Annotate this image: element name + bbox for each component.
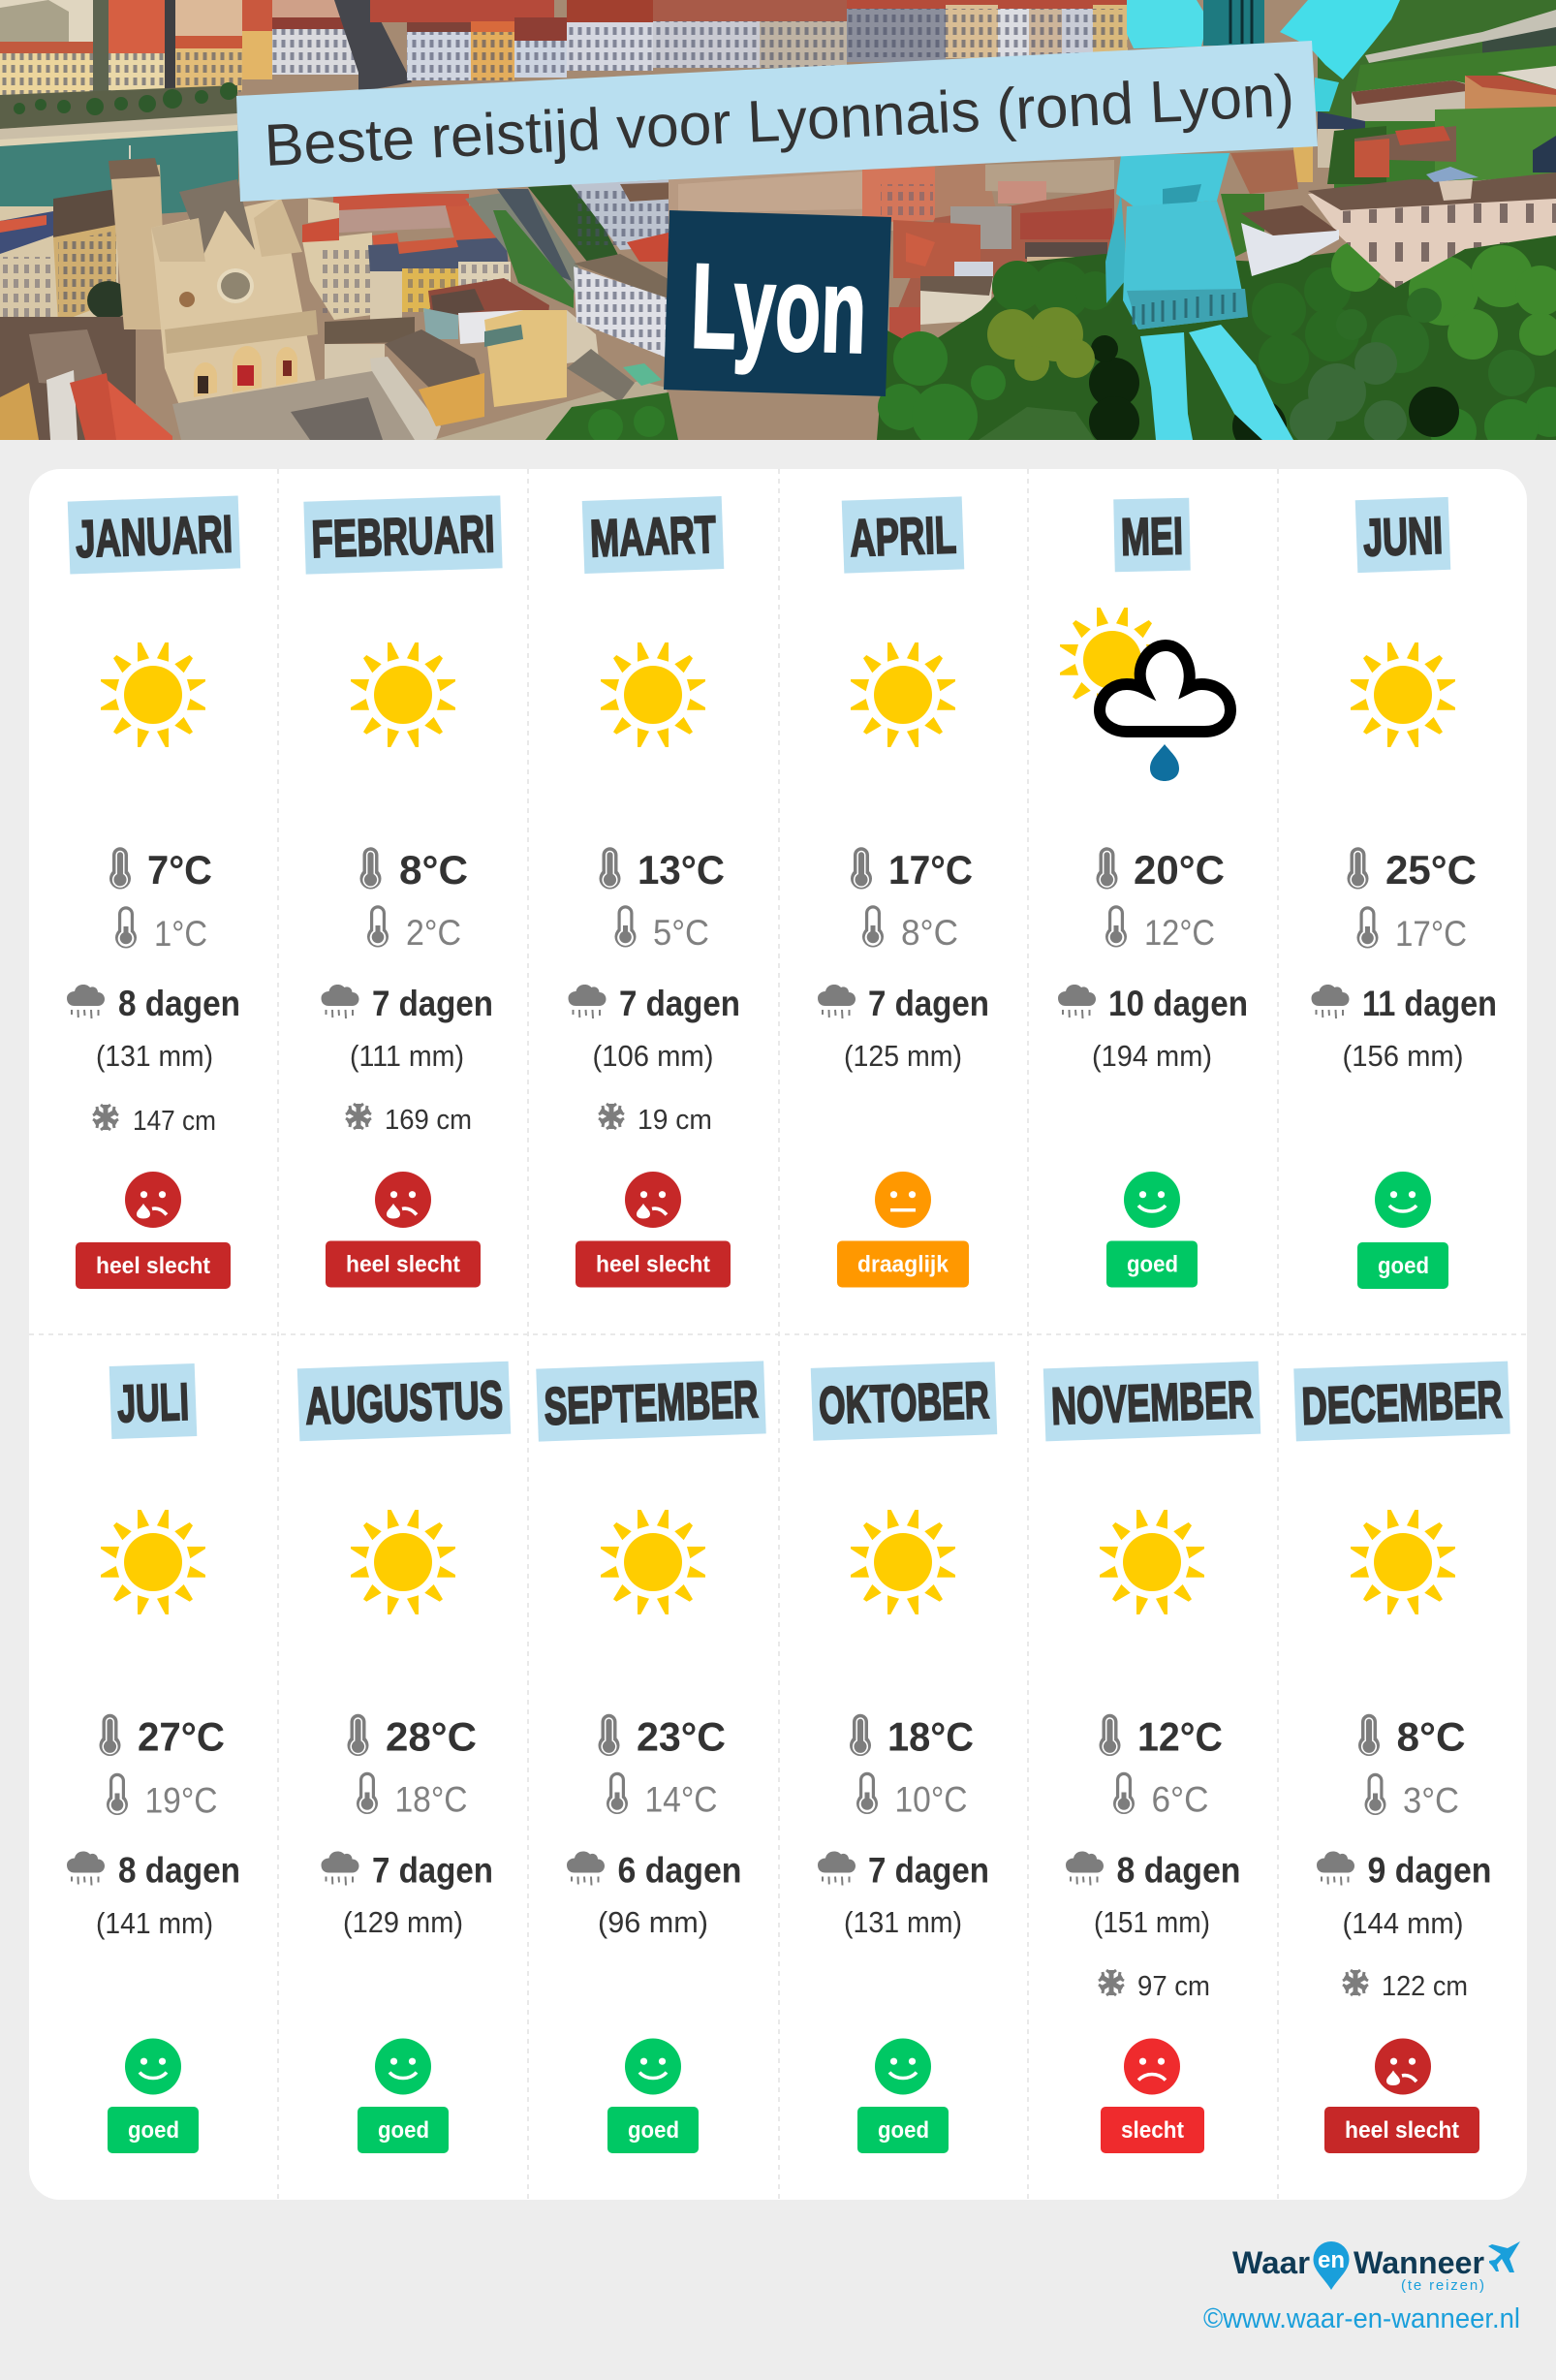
left district [0, 206, 118, 323]
icon: location pin: en [1318, 2247, 1345, 2273]
rating badge [1106, 1240, 1198, 1287]
snowfall [93, 1105, 216, 1137]
month heading: april [842, 496, 964, 574]
panel: april [818, 496, 989, 1287]
min temperature [115, 906, 207, 954]
middle roofs beyond title [669, 163, 911, 231]
rain days [322, 984, 493, 1023]
rain days: 6 dagen [618, 1851, 742, 1890]
month heading: augustus [297, 1362, 511, 1441]
month heading: maart [582, 496, 724, 574]
rating badge: heel slecht [596, 1252, 710, 1277]
min temperature: 10°C [895, 1779, 967, 1820]
rain days: 7 dagen [372, 984, 493, 1023]
max temperature: 13°C [638, 847, 725, 892]
min temperature [862, 905, 958, 953]
rating badge: slecht [1121, 2117, 1184, 2144]
rain days: 8 dagen [118, 1851, 240, 1890]
garden and road [465, 189, 581, 300]
panel: september [536, 1361, 766, 2153]
rating badge [607, 2107, 699, 2153]
far bank buildings [0, 0, 93, 42]
rainfall: (151 mm) [1094, 1905, 1210, 1939]
logo: Waar en Wanneer: Wanneer [1354, 2245, 1484, 2280]
rain days: 8 dagen [118, 984, 240, 1023]
central district [302, 233, 372, 320]
snowfall: 122 cm [1382, 1971, 1468, 2002]
min temperature: 6°C [1151, 1779, 1209, 1820]
white calendar card [29, 469, 1527, 2200]
panel: maart [568, 496, 740, 1287]
month heading: januari [68, 495, 240, 575]
rain days [567, 1851, 742, 1890]
rain days [67, 984, 240, 1023]
max temperature: 27°C [138, 1713, 225, 1760]
panel: juli [67, 1363, 240, 2153]
month heading: oktober: OKTOBER [818, 1371, 990, 1435]
rain days [818, 1851, 989, 1890]
icon: sun [1100, 1510, 1204, 1614]
icon: sun [351, 1510, 455, 1614]
min temperature: 8°C [901, 913, 958, 953]
min temperature: 18°C [395, 1779, 467, 1820]
rating face [125, 2039, 181, 2095]
max temperature [599, 1713, 726, 1760]
rainfall: (96 mm) [598, 1905, 708, 1939]
rating face [1124, 2039, 1180, 2095]
panel: mei [1058, 498, 1248, 1287]
icon: sun [1351, 642, 1455, 747]
snowfall [1099, 1970, 1210, 2002]
icon: sun [601, 1510, 705, 1614]
month heading: oktober [811, 1362, 997, 1441]
rating badge: goed [878, 2117, 929, 2144]
rating face [875, 2039, 931, 2095]
rain days: 7 dagen [868, 984, 989, 1023]
rating face [625, 1172, 681, 1228]
logo: Waar en Wanneer [1232, 2241, 1520, 2294]
min temperature [856, 1772, 967, 1820]
rain days [1066, 1851, 1240, 1890]
max temperature: 7°C [147, 847, 212, 892]
snowfall [1343, 1970, 1468, 2002]
icon: sun behind rain cloud [1060, 608, 1230, 781]
rating face [375, 2039, 431, 2095]
icon: sun [101, 1510, 205, 1614]
snowfall: 97 cm [1137, 1971, 1210, 2002]
rain days [818, 984, 989, 1023]
icon: sun [851, 642, 955, 747]
month heading: maart: MAART [589, 506, 717, 568]
rainfall: (156 mm) [1343, 1039, 1463, 1073]
max temperature: 8°C [1397, 1713, 1465, 1760]
rating badge [358, 2107, 449, 2153]
panel: juni [1312, 497, 1497, 1289]
rain days [1058, 984, 1248, 1023]
month heading: september [536, 1361, 766, 1442]
panel: oktober [811, 1362, 997, 2153]
min temperature [357, 1772, 467, 1820]
month heading: november [1043, 1362, 1260, 1441]
rain days: 7 dagen [372, 1851, 493, 1890]
snowfall [346, 1104, 472, 1136]
month heading: juni [1355, 497, 1450, 573]
min temperature [1113, 1772, 1209, 1820]
rating badge: heel slecht [346, 1252, 460, 1277]
icon: sun [1351, 1510, 1455, 1614]
rainfall: (125 mm) [844, 1039, 962, 1073]
min temperature [107, 1773, 217, 1820]
max temperature [1099, 1713, 1223, 1760]
rain days: 8 dagen [1116, 1851, 1240, 1890]
rating badge [108, 2107, 199, 2153]
icon: sun [101, 642, 205, 747]
icon: airplane [1488, 2241, 1520, 2272]
snowfall: 19 cm [638, 1105, 712, 1136]
max temperature [599, 847, 725, 892]
rating badge [857, 2107, 949, 2153]
city label: Lyon [664, 210, 891, 396]
max temperature [1358, 1713, 1465, 1760]
max temperature: 20°C [1134, 847, 1225, 892]
min temperature: 14°C [645, 1779, 717, 1820]
max temperature: 25°C [1385, 847, 1477, 892]
panel: januari [67, 495, 240, 1289]
rainfall: (131 mm) [844, 1905, 962, 1939]
min temperature [614, 905, 709, 953]
rating face [875, 1172, 931, 1228]
rain days [322, 1851, 493, 1890]
max temperature [360, 847, 468, 892]
right of road [571, 179, 678, 250]
max temperature [850, 1713, 974, 1760]
rating face [625, 2039, 681, 2095]
panel: augustus [297, 1362, 511, 2153]
rating badge: goed [628, 2117, 679, 2144]
snowfall: 169 cm [385, 1105, 472, 1136]
rating face [375, 1172, 431, 1228]
rating face [1124, 1172, 1180, 1228]
rain days: 9 dagen [1368, 1851, 1492, 1890]
rating badge: goed [1378, 1253, 1429, 1279]
min temperature [1105, 905, 1215, 953]
rating face [1375, 1172, 1431, 1228]
rainfall: (141 mm) [96, 1906, 213, 1940]
month heading: januari: JANUARI [75, 505, 233, 569]
min temperature [1364, 1773, 1459, 1820]
rainfall: (144 mm) [1343, 1906, 1463, 1940]
rating badge [576, 1240, 731, 1287]
month heading: april: APRIL [849, 506, 957, 568]
icon: sun [351, 642, 455, 747]
month heading: mei [1113, 498, 1191, 572]
min temperature: 5°C [653, 913, 709, 953]
icon: location pin [1314, 2241, 1349, 2290]
rain days [1317, 1851, 1492, 1890]
rainfall: (106 mm) [593, 1039, 713, 1073]
rating badge [1357, 1242, 1448, 1289]
rain days: 7 dagen [868, 1851, 989, 1890]
min temperature [607, 1772, 717, 1820]
min temperature: 3°C [1403, 1781, 1459, 1820]
min temperature: 1°C [154, 914, 207, 954]
rain days [1312, 984, 1497, 1023]
rating badge [837, 1240, 969, 1287]
far right [1318, 0, 1556, 126]
panel: december [1293, 1362, 1510, 2153]
header photo: Lyon aerial view with statue [0, 0, 1556, 454]
min temperature: 12°C [1144, 913, 1215, 953]
max temperature [109, 847, 212, 892]
statue [1127, 0, 1208, 48]
rainfall: (129 mm) [343, 1905, 463, 1939]
city label: Lyon: Lyon [689, 239, 868, 379]
icon: sun [851, 1510, 955, 1614]
title banner: Beste reistijd voor Lyonnais (rond Lyon) [263, 62, 1295, 178]
min temperature [367, 905, 461, 953]
title banner [236, 41, 1318, 202]
rating badge [326, 1240, 481, 1287]
rain days: 11 dagen [1362, 984, 1497, 1023]
min temperature: 17°C [1395, 914, 1467, 954]
logo: Waar en Wanneer: (te reizen) [1401, 2277, 1484, 2294]
max temperature: 28°C [386, 1713, 477, 1760]
month heading: juni: JUNI [1362, 507, 1444, 567]
snowfall [599, 1104, 712, 1136]
min temperature: 19°C [145, 1781, 217, 1820]
icon: sun [601, 642, 705, 747]
max temperature: 18°C [887, 1713, 974, 1760]
snowfall: 147 cm [133, 1106, 216, 1137]
rating badge: heel slecht [96, 1253, 210, 1279]
month heading: mei: MEI [1120, 507, 1184, 567]
max temperature [99, 1713, 225, 1760]
max temperature: 8°C [399, 847, 468, 892]
logo: Waar en Wanneer: Waar [1232, 2245, 1310, 2280]
month heading: juli: JULI [116, 1373, 190, 1433]
quay and river [0, 85, 237, 129]
panel: november [1043, 1362, 1260, 2153]
min temperature: 2°C [406, 913, 461, 953]
website credit: ©www.waar-en-wanneer.nl [1203, 2303, 1520, 2334]
rating face [125, 1172, 181, 1228]
rating badge [1101, 2107, 1204, 2153]
rating badge [76, 1242, 231, 1289]
rating face [1375, 2039, 1431, 2095]
month heading: november: NOVEMBER [1050, 1370, 1254, 1436]
rating badge: goed [128, 2117, 179, 2144]
max temperature: 17°C [888, 847, 973, 892]
max temperature [851, 847, 973, 892]
rating badge: heel slecht [1345, 2117, 1459, 2144]
month heading: februari [303, 495, 503, 575]
max temperature: 12°C [1137, 1713, 1223, 1760]
rating badge: draaglijk [857, 1252, 949, 1277]
cathedral [110, 165, 167, 329]
rain days: 10 dagen [1108, 984, 1248, 1023]
month heading: juli [109, 1363, 197, 1439]
trees [545, 392, 678, 440]
rating badge: goed [1127, 1252, 1178, 1277]
month heading: augustus: AUGUSTUS [304, 1370, 504, 1436]
rating badge [1324, 2107, 1479, 2153]
rain days [67, 1851, 240, 1890]
month heading: september: SEPTEMBER [544, 1370, 760, 1436]
rain days [568, 984, 740, 1023]
max temperature: 23°C [637, 1713, 726, 1760]
rainfall: (131 mm) [96, 1039, 213, 1073]
month heading: februari: FEBRUARI [311, 505, 495, 569]
rain days: 7 dagen [619, 984, 740, 1023]
panel: februari [303, 495, 503, 1287]
rainfall: (111 mm) [350, 1039, 464, 1073]
rating badge: goed [378, 2117, 429, 2144]
min temperature [1356, 906, 1467, 954]
rainfall: (194 mm) [1092, 1039, 1212, 1073]
